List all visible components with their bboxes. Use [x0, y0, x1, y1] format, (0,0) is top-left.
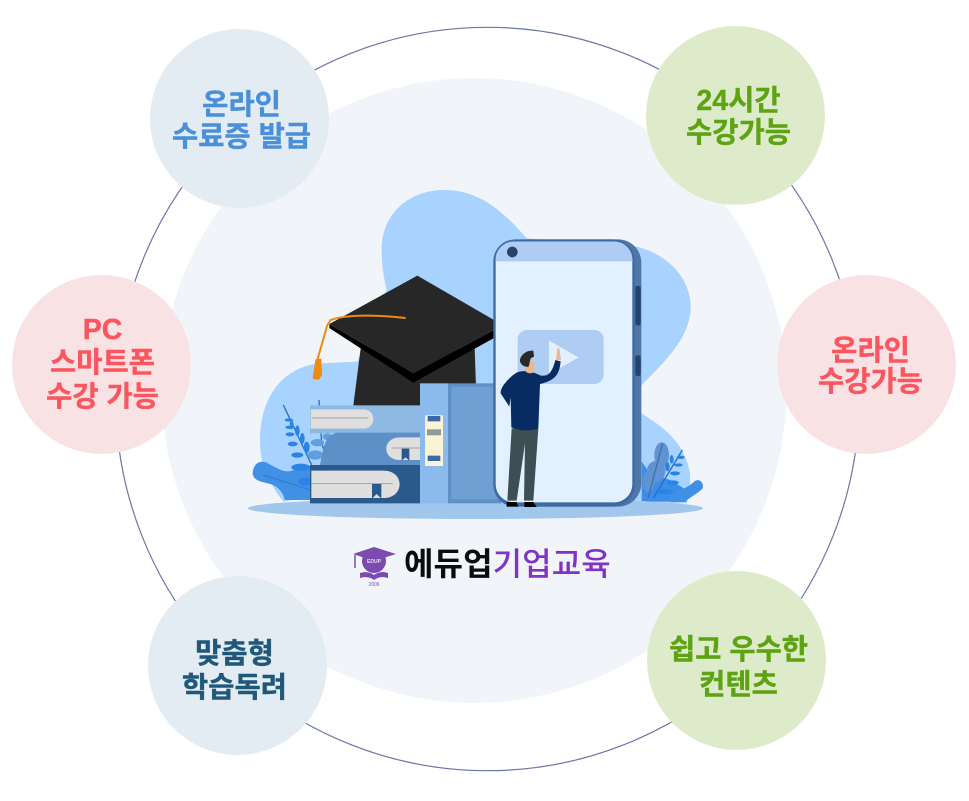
logo emblem: 2006: [368, 582, 380, 588]
smartphone: [493, 239, 641, 507]
bubble: PC smartphone: [12, 275, 191, 454]
book stack: [310, 405, 422, 503]
bubble: custom learning encouragement: 맞춤형: [195, 638, 274, 670]
bubble: online certificate: 온라인: [202, 89, 281, 121]
left plant: [253, 400, 332, 500]
background blobs: [260, 190, 691, 503]
bubble: 24 hours: 수강가능: [686, 116, 791, 148]
bubble: easy contents: [647, 571, 826, 750]
upright book: [420, 383, 501, 503]
right plant: [642, 442, 703, 502]
bubble: online certificate: [150, 29, 329, 208]
ground ellipse: [248, 498, 703, 519]
logo emblem: EDUP: [367, 559, 382, 565]
bubble: easy contents: 쉽고 우수한: [669, 634, 808, 666]
graduation cap: [313, 276, 494, 407]
bubble: PC smartphone: 수강 가능: [46, 381, 159, 413]
illustration: education on mobile: [248, 190, 703, 519]
bubble: PC smartphone: 스마트폰: [50, 347, 155, 379]
outer ring: [116, 27, 859, 771]
bubble: 24 hours: 24시간: [696, 84, 781, 116]
bubble: custom learning encouragement: 학습독려: [182, 672, 287, 704]
bubble: online certificate: 수료증 발급: [172, 121, 311, 153]
inner pale circle: [162, 78, 786, 703]
bubble: online learning: [777, 275, 956, 454]
bubble: online learning: 수강가능: [818, 366, 923, 398]
logo emblem: [353, 547, 396, 588]
person: [501, 348, 561, 507]
bubble: custom learning encouragement: [148, 576, 327, 755]
logo text: 에듀업기업교육: [404, 546, 611, 582]
bubble: PC smartphone: PC: [83, 314, 122, 346]
bubble: online learning: 온라인: [831, 334, 910, 366]
bubble: easy contents: 컨텐츠: [699, 669, 778, 701]
bubble: 24 hours: [646, 26, 825, 205]
